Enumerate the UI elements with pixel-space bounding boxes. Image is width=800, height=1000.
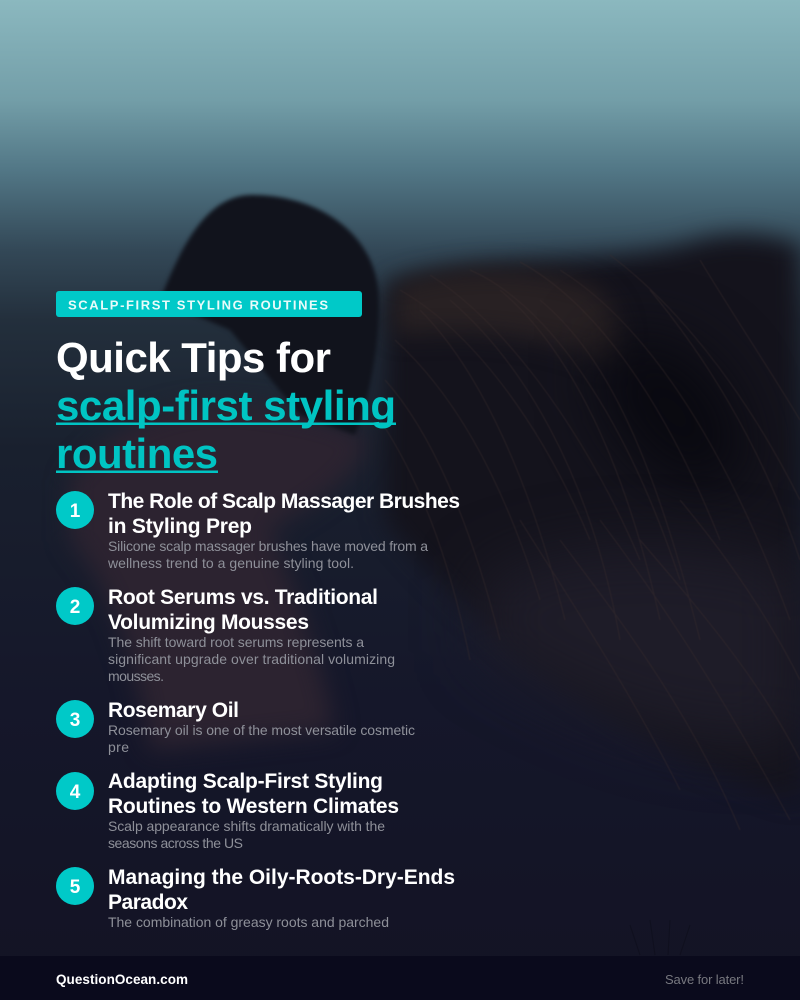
tip 5: The combination of greasy roots and parched: [108, 914, 389, 930]
footer: QuestionOcean.com: [56, 972, 188, 987]
tip 2: significant upgrade over traditional volumizing: [108, 651, 395, 667]
tip 1: The Role of Scalp Massager Brushes: [108, 490, 460, 513]
bottom lash-like shadow: [630, 920, 690, 955]
tip 4: [56, 770, 399, 851]
title: Quick Tips for: [56, 334, 331, 381]
title: scalp-first styling: [56, 382, 396, 429]
footer: [0, 956, 800, 1000]
tip 2: The shift toward root serums represents a: [108, 634, 364, 650]
tip 1: wellness trend to a genuine styling tool.: [107, 555, 354, 571]
tip 4: seasons across the US: [108, 835, 243, 851]
tip 5: Paradox: [108, 891, 188, 914]
tip 5: 5: [70, 877, 81, 898]
lower scalp glow: [480, 545, 800, 744]
tip 3: 3: [70, 710, 80, 731]
dark shadow in hair: [600, 336, 750, 490]
tip 3: [56, 699, 415, 755]
tip 1: [56, 490, 460, 571]
tip 2: Volumizing Mousses: [108, 611, 309, 634]
tip 3: Rosemary Oil: [108, 699, 239, 722]
badge: [56, 291, 362, 317]
tip 2: 2: [70, 597, 80, 618]
tip 2: Root Serums vs. Traditional: [108, 586, 378, 609]
warm brown hair highlight: [395, 270, 620, 365]
hair mass: [385, 235, 800, 800]
hand: [70, 404, 370, 750]
title: [56, 334, 396, 477]
tip 3: Rosemary oil is one of the most versatile cosmetic: [108, 722, 415, 738]
tip 2: [56, 586, 395, 684]
tip 4: 4: [70, 782, 81, 803]
tip 4: Scalp appearance shifts dramatically with the: [108, 818, 385, 834]
tip 5: [56, 866, 455, 930]
tip 3: pre: [108, 739, 129, 755]
scalp massager brush: [160, 195, 379, 435]
tip 5: Managing the Oily-Roots-Dry-Ends: [108, 866, 455, 889]
footer: Save for later!: [665, 972, 744, 987]
title: routines: [56, 430, 218, 477]
tip 4: Adapting Scalp-First Styling: [108, 770, 383, 793]
tip 1: in Styling Prep: [108, 515, 252, 538]
tip 1: 1: [70, 501, 81, 522]
badge: SCALP-FIRST STYLING ROUTINES: [68, 298, 328, 312]
tip 1: Silicone scalp massager brushes have moved from a: [108, 538, 428, 554]
tip 2: mousses.: [108, 668, 164, 684]
hair strands: [380, 255, 800, 830]
tip 4: Routines to Western Climates: [108, 795, 399, 818]
